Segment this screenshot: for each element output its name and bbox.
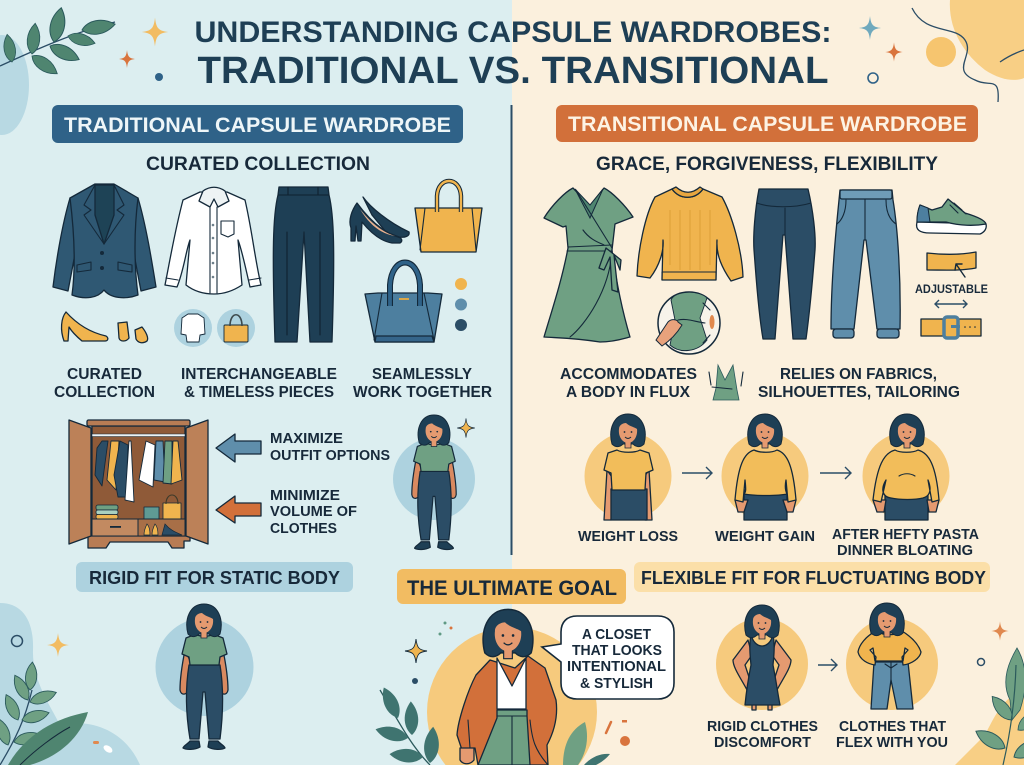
speech bubble: closet goal: INTENTIONAL <box>567 658 666 675</box>
icon: navy trousers <box>273 187 334 342</box>
arrow: minimize <box>216 496 261 523</box>
arrow: gain to bloating <box>820 467 851 479</box>
background: traditional side <box>0 0 512 765</box>
text: accommodates a body in flux <box>560 366 697 401</box>
text: rigid clothes discomfort: RIGID CLOTHES <box>707 718 818 735</box>
icon: fabric stretch circle <box>656 292 720 354</box>
decoration: top-left stars <box>119 18 168 81</box>
text: seamlessly work together <box>353 366 492 401</box>
figure: standing woman with star <box>393 415 475 549</box>
arrow: adjustable double arrow <box>935 300 967 308</box>
speech bubble: closet goal: & STYLISH <box>580 675 653 692</box>
text: relies on fabrics, silhouettes, tailoring: RELIES ON FABRICS, <box>780 366 937 383</box>
title <box>194 16 832 92</box>
text: rigid clothes discomfort <box>707 718 818 751</box>
text: weight gain: WEIGHT GAIN <box>715 528 815 545</box>
figure: clothes that flex with you <box>846 603 938 710</box>
speech bubble: closet goal: THAT LOOKS <box>572 642 662 659</box>
text: clothes that flex with you: CLOTHES THAT <box>839 718 946 735</box>
text: after hefty pasta dinner bloating: AFTER HEFTY PASTA <box>832 526 979 543</box>
background: transitional side <box>512 0 1024 765</box>
decoration: goal plants <box>374 685 610 765</box>
text: maximize outfit options: OUTFIT OPTIONS <box>270 448 390 464</box>
text: interchangeable and timeless pieces <box>181 366 337 401</box>
icon: open wardrobe <box>69 420 208 548</box>
text: seamlessly work together: SEAMLESSLY <box>372 366 472 383</box>
text: relies on fabrics, silhouettes, tailoring: SILHOUETTES, TAILORING <box>758 384 960 401</box>
title: TRADITIONAL VS. TRANSITIONAL <box>198 50 828 92</box>
label: rigid fit for static body <box>76 562 353 592</box>
text: clothes that flex with you <box>836 718 948 751</box>
label: the ultimate goal <box>397 569 626 604</box>
divider <box>510 105 512 555</box>
decoration: bottom-right plants <box>955 621 1024 765</box>
figure: weight gain <box>722 414 808 520</box>
subheading: grace, forgiveness, flexibility: GRACE, FORGIVENESS, FLEXIBILITY <box>596 154 938 175</box>
heading: transitional capsule wardrobe <box>556 105 978 142</box>
text: curated collection: COLLECTION <box>54 384 155 401</box>
subheading: curated collection: CURATED COLLECTION <box>146 154 370 175</box>
text: minimize volume of clothes: VOLUME OF <box>270 504 357 520</box>
label: the ultimate goal: THE ULTIMATE GOAL <box>407 577 617 600</box>
text: after hefty pasta dinner bloating: DINNER BLOATING <box>837 542 973 559</box>
label: flexible fit for fluctuating body <box>634 562 990 592</box>
text: seamlessly work together: WORK TOGETHER <box>353 384 492 401</box>
heading: traditional capsule wardrobe: TRADITIONAL CAPSULE WARDROBE <box>64 114 451 137</box>
figure: rigid clothes discomfort <box>716 605 808 710</box>
text: minimize volume of clothes: MINIMIZE <box>270 488 340 504</box>
decoration: goal sparkles <box>405 622 630 746</box>
text: rigid clothes discomfort: DISCOMFORT <box>714 734 811 751</box>
figure: woman with closet goal <box>427 609 597 765</box>
icon: yellow knit sweater <box>637 187 743 281</box>
icon: white shirt <box>165 187 261 294</box>
text: interchangeable and timeless pieces: INTERCHANGEABLE <box>181 366 337 383</box>
icon: navy high heels <box>350 197 409 243</box>
icon: navy leggings <box>754 189 815 339</box>
text: accommodates a body in flux: ACCOMMODATES <box>560 366 697 383</box>
text: after hefty pasta dinner bloating <box>832 526 979 559</box>
text: minimize volume of clothes: CLOTHES <box>270 521 337 537</box>
icon: mini shirt and bag circles <box>174 309 255 347</box>
label: rigid fit for static body: RIGID FIT FOR STATIC BODY <box>89 567 341 588</box>
icon: stretch waistband <box>927 252 976 277</box>
heading: transitional capsule wardrobe: TRANSITIONAL CAPSULE WARDROBE <box>568 113 967 136</box>
icon: belt with buckle <box>921 317 981 338</box>
icon: green wrap dress <box>544 188 633 342</box>
title: UNDERSTANDING CAPSULE WARDROBES: <box>194 16 832 49</box>
speech bubble: closet goal: A CLOSET <box>582 626 651 643</box>
text: curated collection <box>54 366 155 401</box>
text: interchangeable and timeless pieces: & TIMELESS PIECES <box>184 384 334 401</box>
text: clothes that flex with you: FLEX WITH YOU <box>836 734 948 751</box>
text: relies on fabrics, silhouettes, tailoring <box>758 366 960 401</box>
icon: yellow heel and accessories <box>62 312 148 343</box>
figure: woman in rigid fit <box>156 604 254 749</box>
icon: colour dots <box>455 278 467 331</box>
text: maximize outfit options: MAXIMIZE <box>270 431 343 447</box>
text: weight loss: WEIGHT LOSS <box>578 528 678 545</box>
decoration: top-left leaves <box>0 6 116 135</box>
text: curated collection: CURATED <box>67 366 142 383</box>
speech bubble: closet goal <box>542 616 674 699</box>
label: flexible fit for fluctuating body: FLEXIBLE FIT FOR FLUCTUATING BODY <box>641 567 987 588</box>
arrow: maximize <box>216 434 261 462</box>
icon: blue handbag <box>365 262 442 342</box>
figure: weight loss <box>584 414 672 520</box>
text: accommodates a body in flux: A BODY IN FLUX <box>566 384 690 401</box>
icon: yellow handbag <box>415 181 482 252</box>
decoration: top-right shapes <box>859 0 1024 102</box>
icon: green sneaker <box>917 199 986 234</box>
text: maximize outfit options <box>270 431 390 464</box>
arrow: loss to gain <box>682 467 712 479</box>
arrow: rigid to flexible <box>818 659 837 671</box>
heading: traditional capsule wardrobe <box>52 105 463 143</box>
icon: blazer <box>53 184 156 298</box>
text: adjustable: ADJUSTABLE <box>915 282 988 296</box>
figure: after pasta bloating <box>862 414 950 520</box>
text: minimize volume of clothes <box>270 488 357 537</box>
icon: mini stretch dress <box>709 365 743 400</box>
icon: blue joggers <box>831 190 900 338</box>
decoration: bottom-left plants <box>0 603 140 765</box>
